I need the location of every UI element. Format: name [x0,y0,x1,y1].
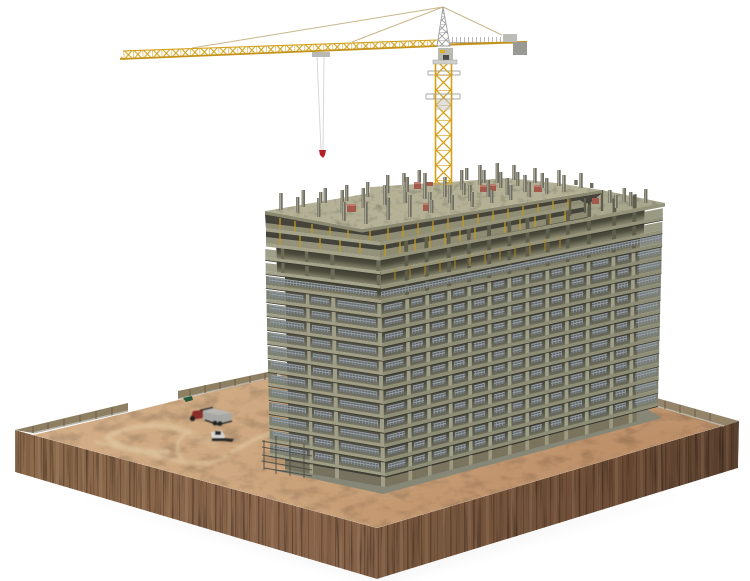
open level under roof slab [265,193,602,242]
shoring props on second level [395,236,560,280]
short column linking slabs at right [570,190,602,216]
counter jib [450,34,527,44]
slewing cab [438,48,453,64]
tyre tracks on ground [95,424,270,463]
crane tie rods [192,7,502,48]
crane head tower [437,7,450,46]
right facade floors [379,202,663,487]
sandy ground surface [33,345,739,528]
hook cables [317,56,324,150]
counterweight [513,42,527,55]
green dumpster [183,396,193,402]
left facade floors [265,243,385,487]
wooden retaining wall: right face [377,421,739,579]
site base [15,345,739,579]
yellow shoring props under roof slab [280,199,568,242]
lower mast [436,64,452,185]
second slab [266,203,588,246]
wooden retaining wall: left face [15,430,377,579]
soft ground shadow [60,490,700,581]
lit slab surface beneath roof [266,200,588,242]
reddish ground near the front [250,430,700,528]
rooftop columns and rebar [280,163,646,224]
scaffolding at lower left corner [262,436,312,478]
building [262,163,665,494]
fence: rear-left section [178,370,277,399]
trolley [312,52,330,57]
third slab and open level above it [266,190,665,260]
tower crane [120,7,527,185]
roof slab edge [265,190,602,232]
upper mast with platforms [426,60,460,111]
roof slab surface [265,178,602,229]
rooftop material boxes [347,182,599,212]
skid-steer loader [211,430,234,442]
fence: front-left section [15,403,128,433]
base plate [272,408,662,494]
fence: right section [653,397,739,426]
hook block [319,150,326,158]
dump truck [190,408,232,426]
main jib [120,40,438,59]
